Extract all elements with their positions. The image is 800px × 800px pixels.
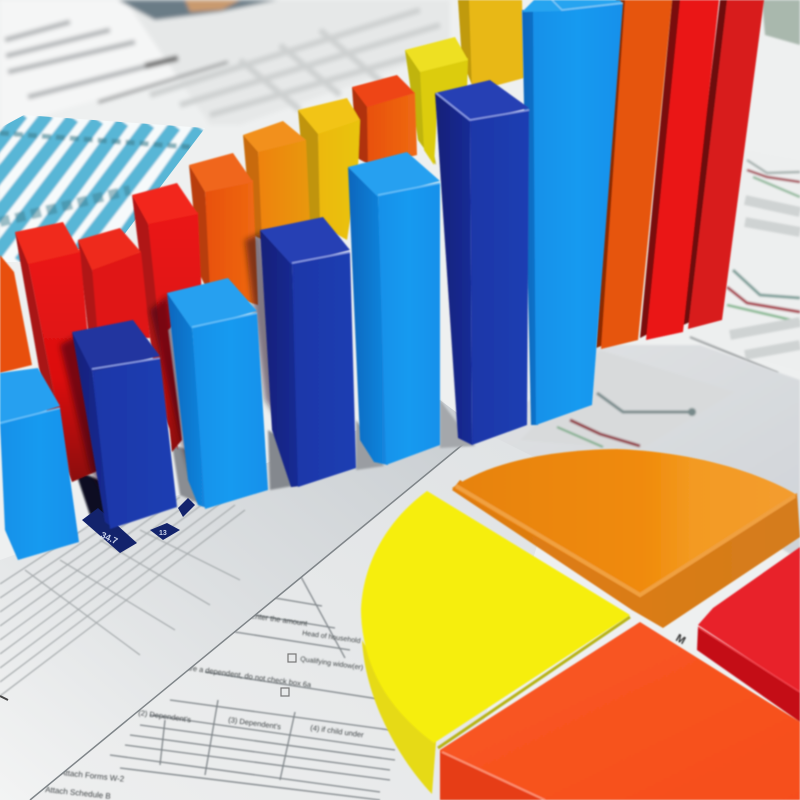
bar: red 3 <box>132 183 202 452</box>
bar: red tall right <box>681 0 764 329</box>
teal table stripes <box>0 110 210 265</box>
pie slice: orange-red <box>440 622 800 800</box>
bar: red tall middle <box>640 0 719 340</box>
bar: dark blue 2 <box>260 217 356 487</box>
bar: light blue 2 <box>167 278 268 509</box>
bar: dark blue 3 <box>435 80 529 445</box>
lower form paper: Qualifying widow(er) <box>300 656 364 672</box>
bar: dark blue 1 <box>72 320 177 529</box>
bar: light blue 1 <box>0 368 79 560</box>
bar: orange tall right <box>596 0 672 349</box>
bar: amber <box>243 121 310 240</box>
lower form paper: (4) if child under <box>310 723 365 740</box>
lower form paper: (2) Dependent's <box>138 708 192 724</box>
pie chart <box>361 449 800 800</box>
center line chart paper <box>440 345 800 560</box>
bar: light blue 4 <box>522 0 623 425</box>
right side line chart paper <box>690 0 800 373</box>
paper edge line <box>30 432 478 800</box>
bar: red 1 <box>15 222 100 482</box>
bar: yellow tall <box>458 0 524 92</box>
pie slice: yellow <box>361 491 630 794</box>
bar: orange left <box>0 255 32 373</box>
lower table paper <box>0 400 480 800</box>
lower form paper: (3) Dependent's <box>228 715 282 731</box>
bar: orange 2 <box>189 153 258 305</box>
bar: red 2 <box>78 228 150 338</box>
form marks between pie slices: M <box>674 632 687 647</box>
bar: light blue 3 <box>348 152 440 465</box>
data labels: 13 <box>159 530 167 537</box>
lower form paper: Attach Forms W-2 <box>60 768 125 784</box>
bar: orange-red <box>352 75 417 168</box>
bar chart: back row <box>0 0 764 482</box>
data labels: 34.7 <box>99 530 119 546</box>
pie slice: red <box>697 547 800 722</box>
lower form paper <box>44 447 536 800</box>
top left document <box>0 0 450 128</box>
pie slice: orange <box>452 449 800 628</box>
lower form paper: you are a dependent, do not check box 6a <box>172 661 313 690</box>
lower form paper: Head of household <box>302 630 361 645</box>
shadows at the base of the bars <box>75 400 475 525</box>
bar: yellow <box>405 37 468 165</box>
shade cast on the back row <box>60 232 285 500</box>
lower form paper: Enter the amount <box>250 611 309 628</box>
bar: gold <box>298 98 360 240</box>
data labels <box>82 498 195 553</box>
bar chart: front row <box>0 0 623 560</box>
